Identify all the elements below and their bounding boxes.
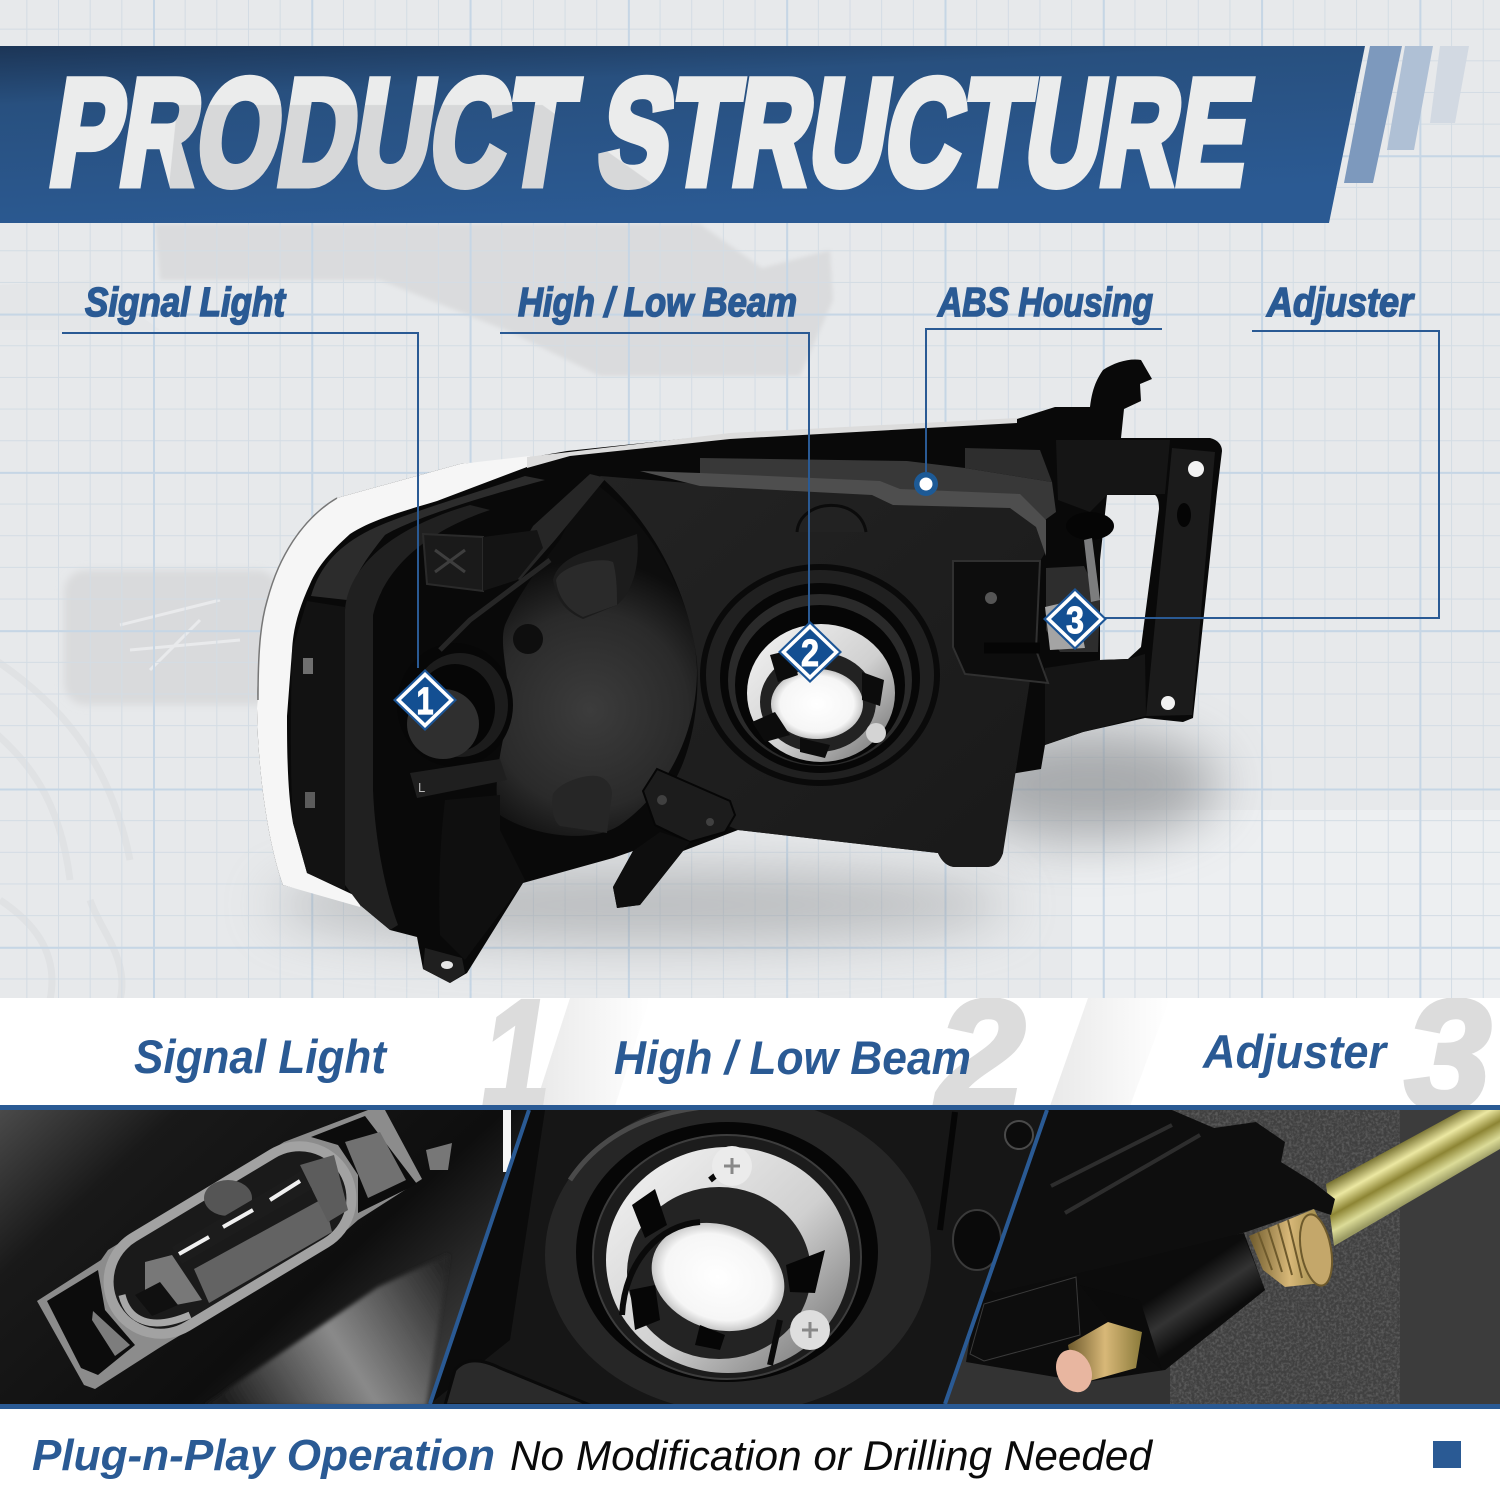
right floor patch [300,1155,348,1222]
rubber ring highlight [568,1110,698,1182]
light ridge strip [640,471,1046,556]
bracket lower arm [1045,654,1146,745]
background [0,0,1500,1000]
caption strip [0,998,1500,1105]
socket rubber ring [545,1097,931,1413]
textured wall [1170,1110,1400,1404]
bottom screw [790,1310,830,1350]
connector stadium [104,1141,356,1339]
label: High / Low Beam: High / Low Beam [518,279,797,325]
big number 2: 2 [934,968,1025,1141]
threaded sleeve [1249,1209,1330,1287]
leader line: high low beam [500,333,809,625]
lower grey key [145,1255,202,1308]
inner rim [345,505,490,930]
lens black insert [291,601,345,890]
rubber plug upper [553,534,638,619]
caption 2 fade [1050,998,1170,1106]
retainer arc [622,1160,780,1365]
adjuster rubber boot [1066,512,1114,540]
photo panel: signal light connector [0,1110,530,1406]
header banner [0,46,1365,223]
marker 2 [778,621,842,683]
brass rod [1326,1110,1500,1246]
caption: Adjuster: Adjuster [1202,1025,1389,1078]
label: Adjuster: Adjuster [1266,279,1415,325]
lower bracket [970,1277,1080,1361]
connector frame [37,1110,422,1389]
adjuster rod [1084,538,1100,602]
adjuster light detail [1045,600,1085,650]
white edge [503,1110,511,1172]
leader line: signal light [62,333,418,668]
adjuster screw [985,592,997,604]
big numbers [482,998,1492,1105]
footer [0,1409,1500,1500]
bracket column [1146,448,1215,716]
leader line: adjuster [1100,331,1439,618]
key notch [135,1282,178,1316]
terminals [179,1181,300,1254]
left connector: L [418,780,425,795]
right cylinder [345,1132,406,1198]
big number 3: 3 [1405,968,1491,1141]
diagonal rib [505,474,606,580]
metallic streak [212,1262,442,1404]
label: Signal Light: Signal Light [85,279,287,325]
leader line: ABS housing [926,329,1162,472]
housing silhouette [257,359,1222,983]
textured top band [700,458,1056,520]
headlight assembly [257,359,1222,983]
caption: Signal Light: Signal Light [134,1030,388,1083]
right pocket [311,1116,417,1213]
mount tab [423,948,465,983]
wall grain [1170,1110,1400,1404]
bolt end [1049,1344,1099,1398]
lens top grey shade [311,476,545,600]
right pipe [953,1210,1001,1270]
top screw [712,1146,752,1186]
lower body cylinder [1140,1236,1265,1370]
marker 3: 3 [1066,600,1084,642]
upper black bracket [979,1110,1335,1293]
label: ABS Housing: ABS Housing [937,279,1153,325]
big number 1: 1 [482,968,550,1141]
photo frame lines [0,1105,1500,1409]
rubber plug upper face [556,560,617,617]
chrome lens edge [257,456,530,907]
moulded arc [797,505,866,532]
caption: High / Low Beam: High / Low Beam [614,1031,971,1084]
caption 1 fade [535,998,650,1106]
marker 1: 1 [416,681,434,723]
bright lens [652,1222,784,1332]
bracket holes [1161,461,1204,710]
headlight shadow [270,730,1220,943]
photo panel: adjuster rod [945,1110,1500,1404]
rubber plug lower [552,776,612,833]
smooth right side [1398,1110,1500,1404]
lens marks [303,658,315,808]
pin channel [225,1186,312,1216]
photo panel: high low beam socket [428,1097,1048,1413]
retainer tabs [630,1189,825,1350]
centre plate [600,476,1045,867]
left pocket [47,1270,135,1375]
reflector stud [513,624,543,654]
upper pin bump [204,1180,252,1216]
sleeve threads [1258,1220,1302,1278]
adjuster recess [1046,566,1100,652]
top-left clip [423,530,543,591]
left connector [410,759,507,798]
right slot [940,1112,955,1230]
header accent stripes [1344,46,1469,183]
dark left bowl [430,1110,545,1404]
footer square [1433,1441,1461,1468]
adjuster wire [984,642,1040,654]
chrome reflector [606,1147,850,1373]
adjuster box [953,561,1048,683]
side clip [426,1143,452,1170]
lower plate [445,1361,590,1405]
lower arc [122,1295,190,1323]
lower bolt [1068,1322,1142,1385]
wire loom [440,560,550,650]
socket black ring [576,1122,878,1382]
marker 3 [1043,588,1107,650]
marker: ABS housing dot [914,472,938,496]
centre socket [700,564,940,786]
left bulb [397,643,513,767]
lower housing rib [439,795,525,960]
right screw [1005,1121,1033,1149]
lens outer line [258,498,337,700]
connector floor [194,1198,332,1303]
inner retainer [627,1187,811,1359]
footer note: No Modification or Drilling Needed [510,1432,1154,1479]
rib highlights [1051,1125,1200,1213]
marker 2: 2 [801,633,819,675]
marker 1 [393,669,457,731]
washer [1295,1212,1337,1288]
housing upper panel [965,448,1052,482]
lower black mass [966,1233,1265,1382]
socket grey ring [593,1135,861,1379]
bracket top arm [1056,440,1170,512]
left pocket ledge [92,1311,130,1356]
left reflector bowl [497,480,697,836]
lower connector [613,769,735,908]
footer highlight: Plug-n-Play Operation [32,1431,495,1480]
lower nut [1080,1285,1162,1370]
top chrome line [527,418,1017,468]
